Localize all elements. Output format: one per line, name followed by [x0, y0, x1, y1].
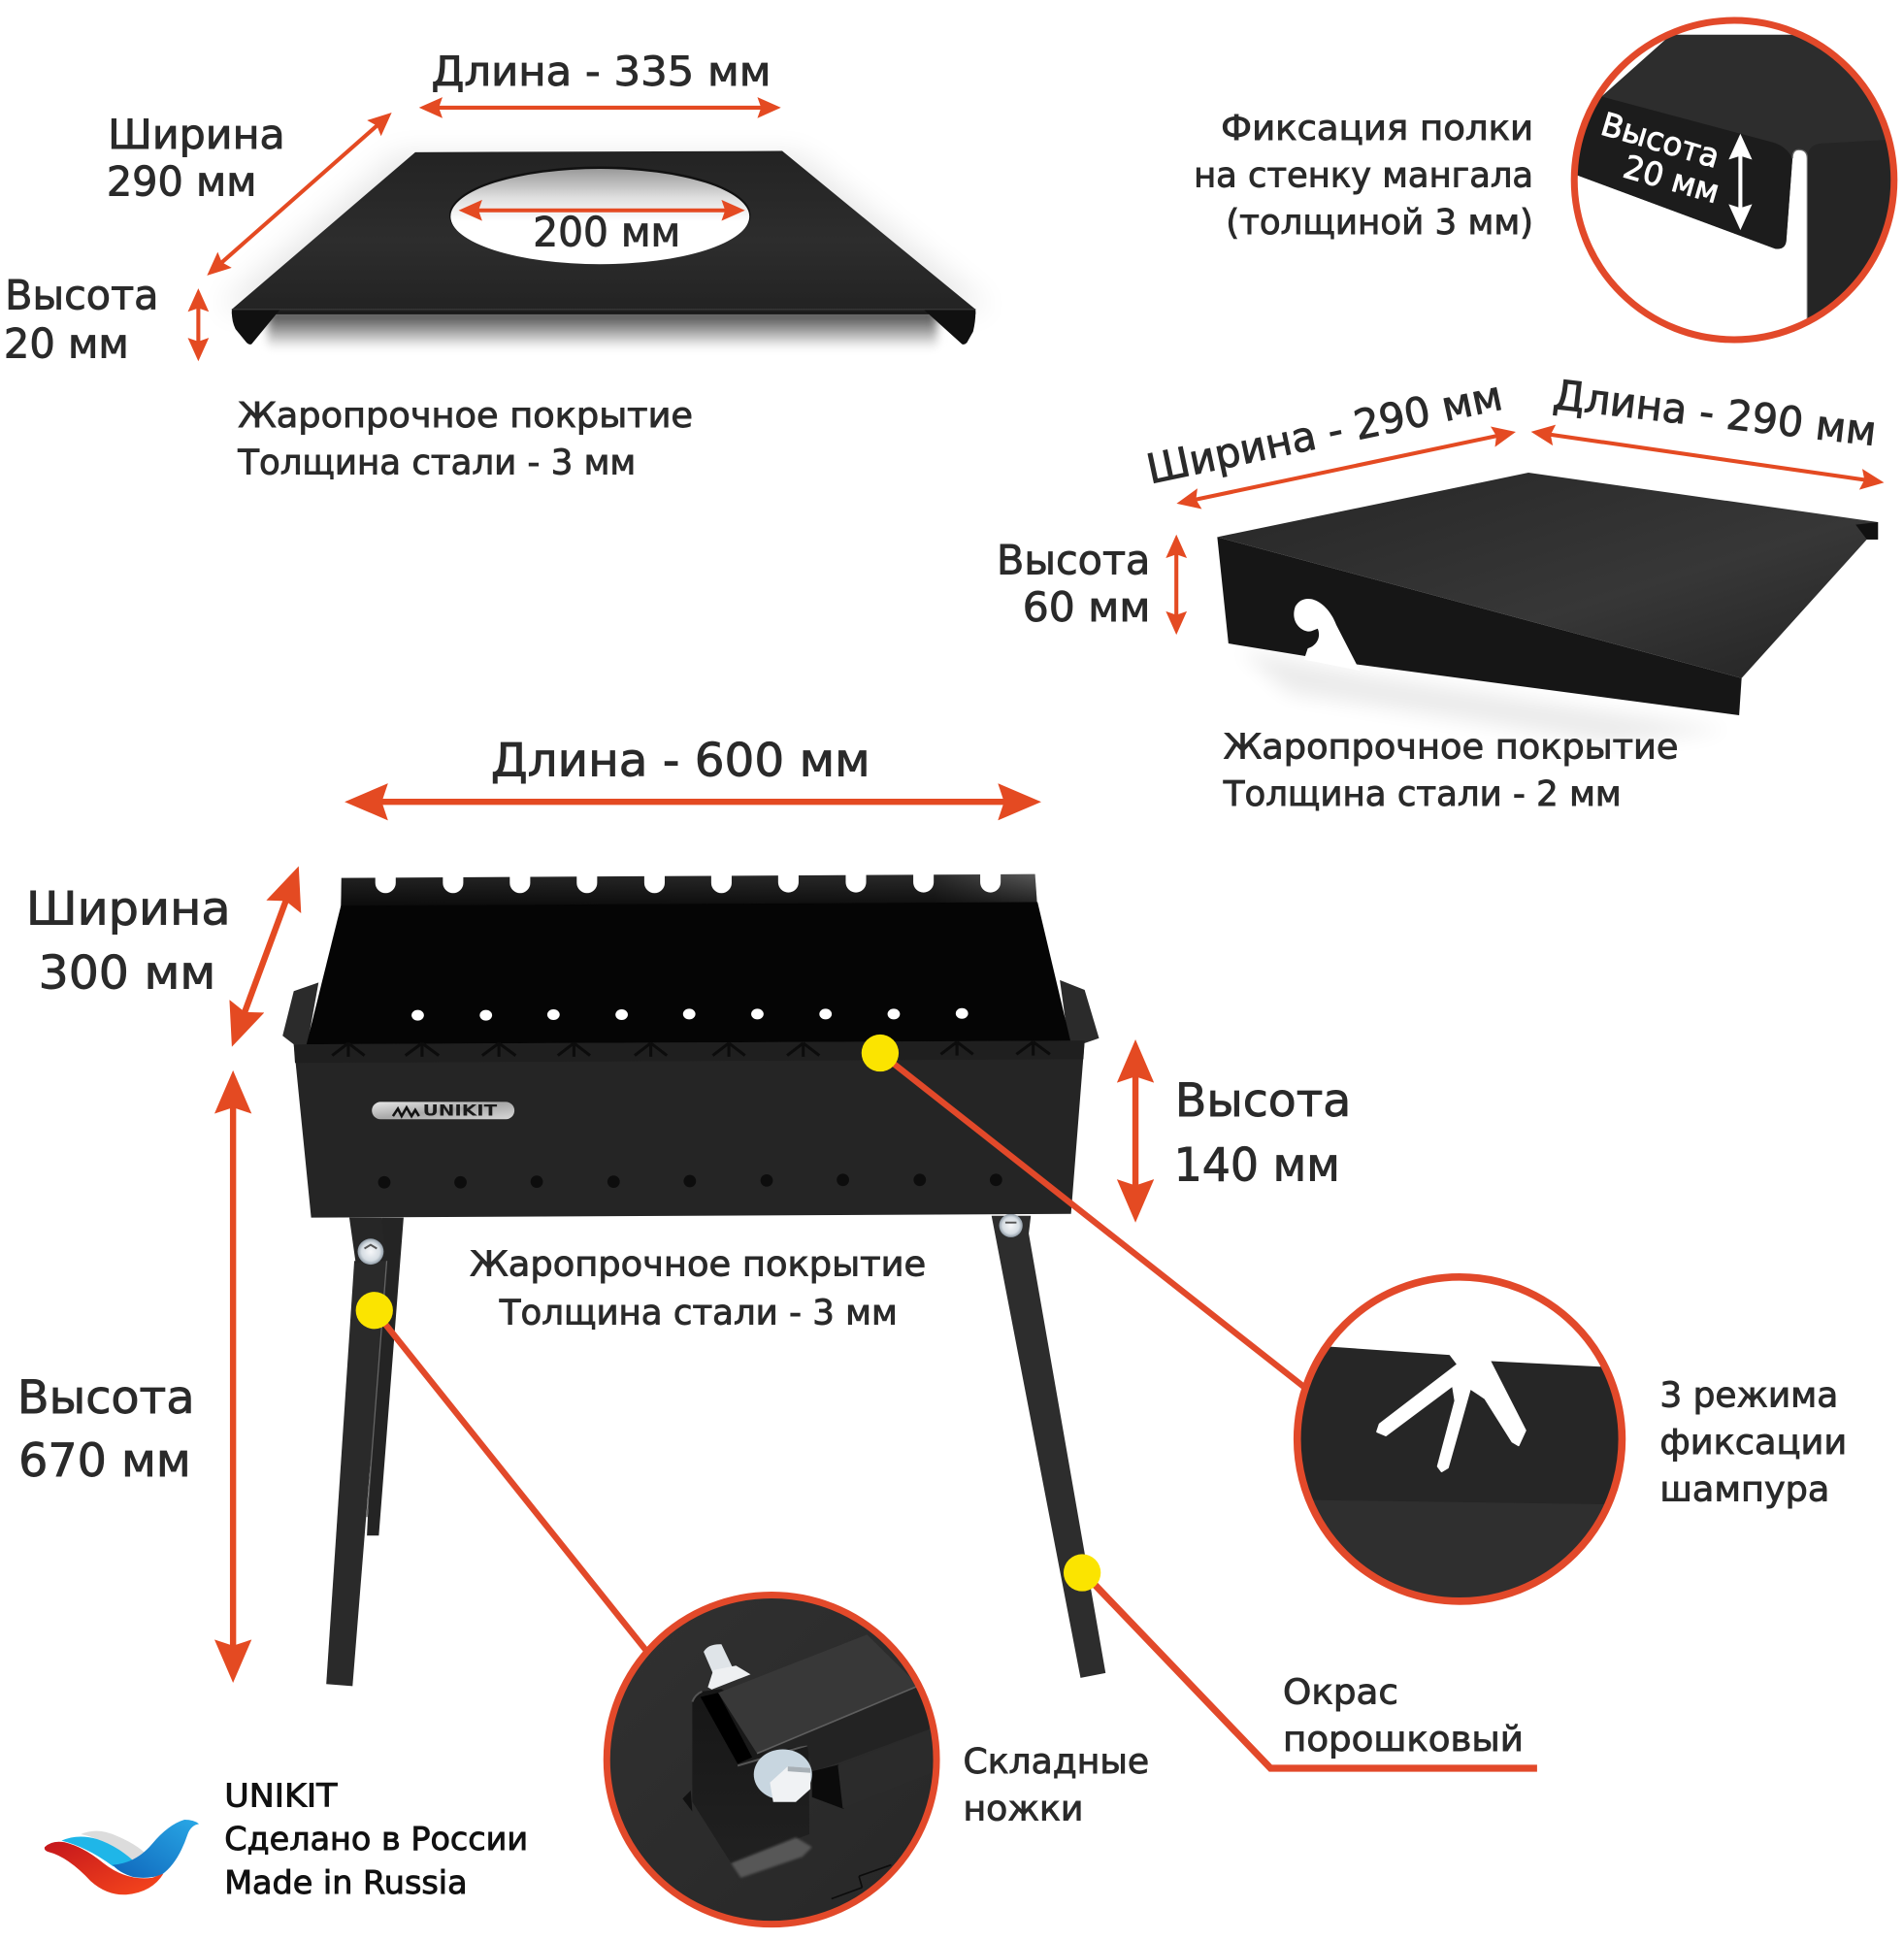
arrow: width — [214, 119, 384, 269]
label: width: Ширина — [108, 111, 285, 158]
label: width — [107, 111, 285, 205]
label: flange height: Высота — [1596, 105, 1724, 176]
label: length: Длина - 335 мм — [432, 48, 771, 95]
shelf shadow — [1239, 649, 1729, 742]
text: coating and steel — [1223, 728, 1679, 814]
text: made in Russia: Сделано в России — [224, 1820, 528, 1858]
label: height — [4, 272, 159, 367]
text: coating and steel: Толщина стали - 2 мм — [1223, 774, 1622, 814]
label: box height: Высота — [1175, 1074, 1351, 1128]
text: folding legs — [963, 1742, 1149, 1829]
arrow: overall length — [357, 800, 1029, 805]
plate shadow — [268, 310, 937, 349]
label: height: 60 мм — [1023, 583, 1150, 631]
text: coating and steel — [237, 396, 693, 482]
label: width: Ширина - 290 мм — [1142, 372, 1506, 493]
label: overall height: 670 мм — [18, 1434, 191, 1488]
shelf body — [1217, 473, 1878, 715]
panel: round-hole top plate — [4, 48, 992, 482]
arrow: overall height — [231, 1083, 236, 1670]
label: height: Высота — [5, 272, 159, 319]
arrow: width — [1186, 434, 1506, 502]
legs — [326, 1214, 1105, 1686]
text: powder coating: Окрас — [1283, 1673, 1398, 1713]
label: overall height — [17, 1371, 195, 1488]
detail circle: skewer fixing — [1289, 1277, 1636, 1621]
text: powder coating: порошковый — [1283, 1720, 1524, 1760]
back wall with skewer notches — [341, 864, 1037, 909]
text: coating and steel: Жаропрочное покрытие — [470, 1245, 926, 1285]
arrow: length — [429, 106, 771, 110]
yellow marker dots — [356, 1035, 1100, 1592]
text: skewer fixing: шампура — [1659, 1470, 1829, 1510]
star slots — [332, 1042, 1050, 1057]
text: skewer fixing: 3 режима — [1659, 1376, 1838, 1416]
text: shelf fixing: Фиксация полки — [1221, 109, 1533, 148]
text: folding legs: Складные — [963, 1742, 1149, 1782]
text: shelf fixing — [1194, 109, 1533, 243]
label: width: Ширина — [26, 882, 231, 936]
label: overall length: Длина - 600 мм — [491, 734, 870, 787]
arrow: hole diameter — [469, 209, 735, 212]
arrow: width — [236, 878, 294, 1036]
arrow: box height — [1133, 1052, 1138, 1210]
label: flange height — [1596, 105, 1724, 211]
arrow: height — [197, 298, 200, 351]
panel: sloped shelf — [997, 371, 1879, 814]
text: coating and steel: Жаропрочное покрытие — [238, 396, 693, 436]
text: made in Russia: UNIKIT — [224, 1777, 338, 1815]
text: skewer fixing: фиксации — [1659, 1423, 1847, 1463]
icon: Russia logo — [45, 1820, 199, 1894]
lower air holes — [378, 1173, 1002, 1189]
detail circle: slot — [1561, 20, 1904, 352]
detail circle: folding legs — [607, 1596, 936, 1925]
arrow: flange height — [1739, 146, 1742, 217]
text: coating and steel: Толщина стали - 3 мм — [237, 443, 636, 482]
front wall — [294, 1040, 1085, 1218]
text: coating and steel — [470, 1245, 926, 1332]
text: shelf fixing: на стенку мангала — [1194, 156, 1533, 196]
label: box height — [1174, 1074, 1351, 1192]
label: hole diameter: 200 мм — [533, 209, 680, 256]
label: height — [997, 537, 1150, 631]
label: width: 300 мм — [39, 947, 215, 1001]
shelf hook cut-out — [1294, 599, 1360, 671]
text: made in Russia: Made in Russia — [224, 1863, 468, 1901]
badge: UNIKIT nameplate: UNIKIT — [423, 1101, 497, 1119]
text: shelf fixing: (толщиной 3 мм) — [1226, 203, 1533, 243]
label: box height: 140 мм — [1174, 1138, 1340, 1192]
side wings — [282, 980, 1099, 1044]
label: width: 290 мм — [107, 157, 256, 205]
label: width — [26, 882, 231, 1001]
badge: UNIKIT nameplate — [372, 1101, 514, 1119]
plate hole — [449, 166, 750, 264]
text: skewer fixing — [1659, 1376, 1847, 1510]
text: coating and steel: Жаропрочное покрытие — [1224, 728, 1679, 768]
plate halo — [217, 154, 992, 310]
text: made in Russia — [224, 1777, 528, 1901]
callout lines — [375, 1053, 1537, 1768]
text: folding legs: ножки — [963, 1790, 1083, 1829]
label: overall height: Высота — [17, 1371, 195, 1425]
skewer holes — [411, 1008, 968, 1021]
arrow: height — [1175, 544, 1178, 625]
arrow: length — [1541, 433, 1874, 481]
panel: brazier — [17, 734, 1351, 1686]
label: height: 20 мм — [4, 320, 129, 367]
text: powder coating — [1283, 1673, 1524, 1760]
panel: shelf fixing — [1194, 20, 1904, 352]
label: length: Длина - 290 мм — [1551, 371, 1879, 455]
text: coating and steel: Толщина стали - 3 мм — [499, 1293, 898, 1332]
plate body — [232, 151, 975, 345]
label: flange height: 20 мм — [1620, 148, 1723, 211]
label: height: Высота — [997, 537, 1150, 584]
interior — [307, 902, 1071, 1045]
